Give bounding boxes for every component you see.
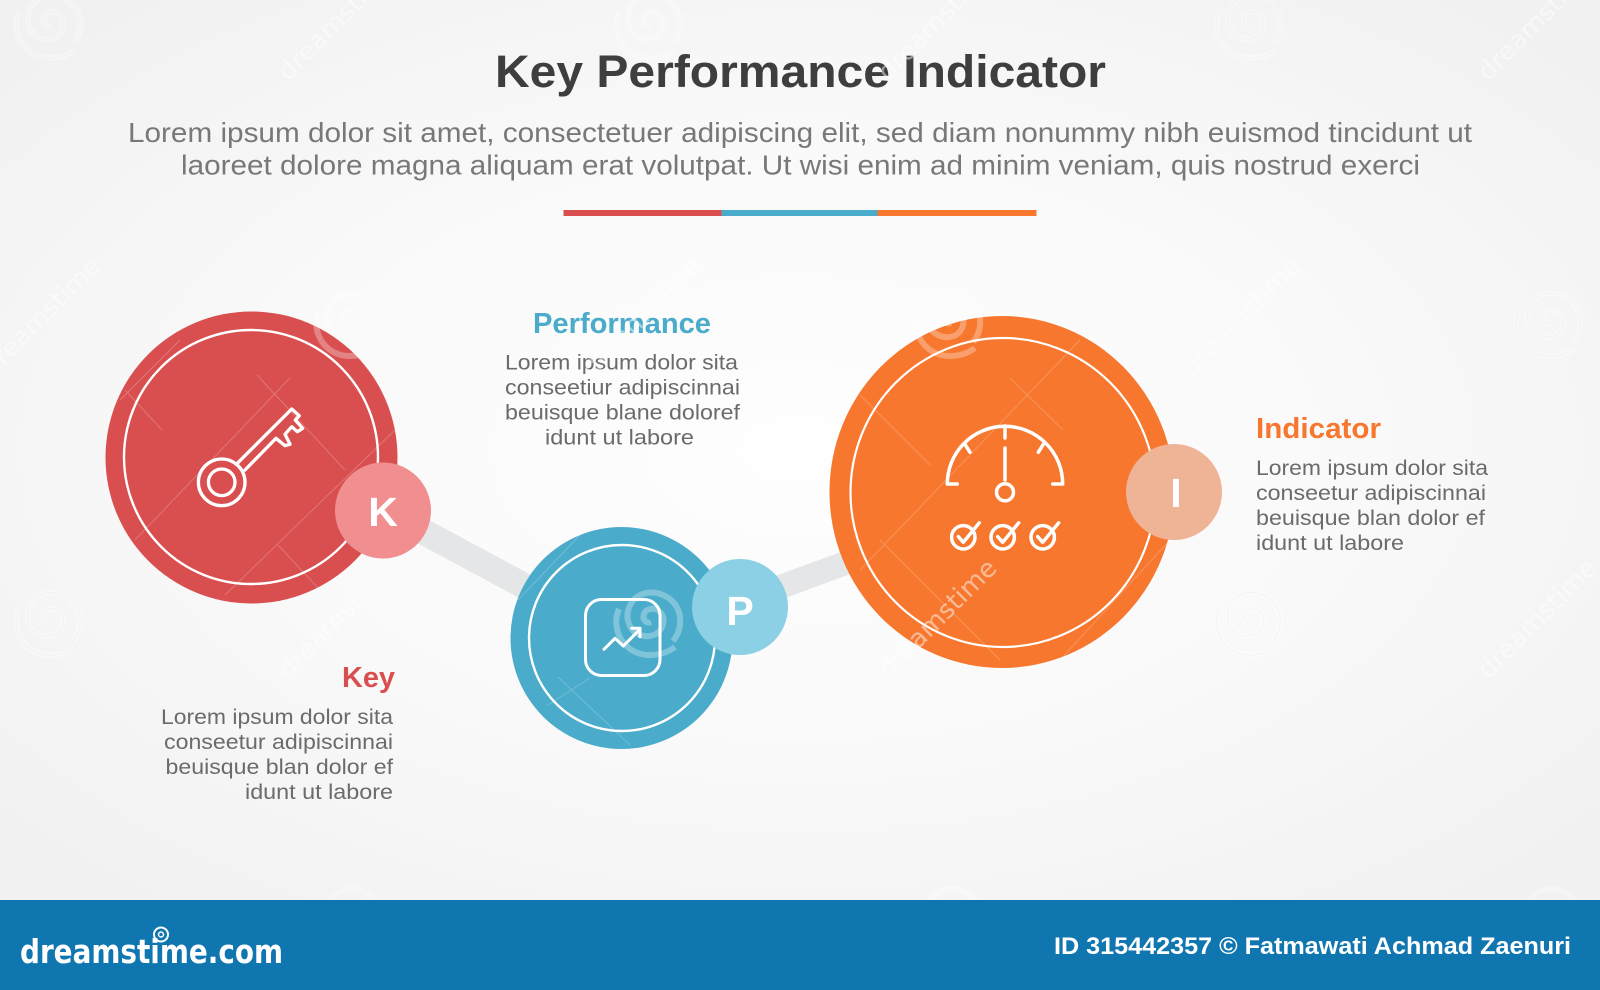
connector: key to performance — [383, 510, 621, 638]
footer credit: ID 315442357 © Fatmawati Achmad Zaenuri — [1054, 933, 1571, 960]
connector: performance to indicator — [700, 543, 900, 616]
body: performance: Lorem ipsum dolor sita — [505, 350, 738, 374]
tricolor divider bar — [564, 210, 1036, 216]
subtitle text block: laoreet dolore magna aliquam erat volutpat. Ut wisi enim ad minim veniam, quis nostrud exerci — [181, 150, 1420, 180]
badge: K — [335, 462, 431, 558]
icon: key — [198, 409, 303, 506]
badge: P — [692, 559, 788, 655]
text block: indicator — [1256, 413, 1488, 555]
watermark layer: dreamstime — [872, 553, 1003, 685]
heading: indicator: Indicator — [1256, 413, 1381, 445]
heading: performance: Performance — [533, 308, 711, 340]
badge: K: K — [368, 489, 398, 535]
panel: performance circle — [510, 527, 732, 749]
watermark layer: dreamstime — [576, 251, 707, 383]
body: performance: conseetiur adipiscinnai — [505, 376, 740, 400]
footer logo: dreamstime.com — [20, 932, 283, 971]
body: performance: beuisque blane doloref — [505, 400, 740, 424]
body: indicator: Lorem ipsum dolor sita — [1256, 456, 1488, 480]
body: indicator — [1256, 456, 1488, 555]
body: indicator: beuisque blan dolor ef — [1256, 506, 1485, 530]
title: Key Performance Indicator — [495, 46, 1106, 97]
subtitle text block — [128, 117, 1472, 180]
body: performance — [505, 350, 740, 450]
body: key: idunt ut labore — [245, 780, 393, 804]
icon: growth chart — [586, 600, 660, 676]
body: key: Lorem ipsum dolor sita — [161, 705, 393, 729]
panel: indicator circle — [830, 316, 1174, 668]
footer bar — [0, 900, 1600, 990]
icon: gauge with checks — [947, 426, 1063, 549]
subtitle text block: Lorem ipsum dolor sit amet, consectetuer adipiscing elit, sed diam nonummy nibh euismod tincidunt ut — [128, 117, 1472, 148]
body: indicator: conseetur adipiscinnai — [1256, 481, 1486, 505]
body: key — [161, 705, 393, 804]
badge: P: P — [726, 588, 754, 634]
body: indicator: idunt ut labore — [1256, 531, 1404, 555]
badge: I — [1126, 444, 1222, 540]
body: performance: idunt ut labore — [545, 426, 694, 450]
watermark layer: dreamstime — [1176, 251, 1307, 383]
watermark layer: dreamstime — [1472, 553, 1600, 685]
panel: key circle — [106, 312, 398, 604]
text block: performance — [505, 308, 740, 450]
text block: key — [161, 662, 395, 804]
body: key: beuisque blan dolor ef — [166, 755, 393, 779]
watermark layer: dreamstime — [272, 553, 403, 685]
body: key: conseetur adipiscinnai — [164, 730, 393, 754]
heading: key: Key — [342, 662, 395, 694]
badge: I: I — [1170, 470, 1182, 516]
